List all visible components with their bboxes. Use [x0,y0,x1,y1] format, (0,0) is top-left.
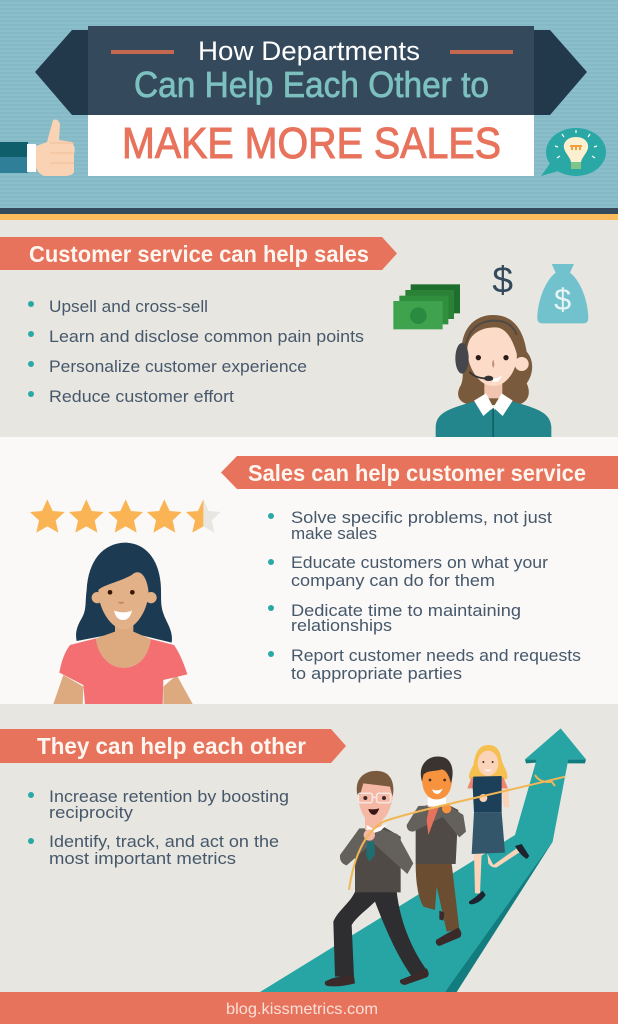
ribbon heading: Sales can help customer service [248,460,586,486]
footer [0,992,618,1024]
bullet list [28,297,364,406]
bullet list: Reduce customer effort [49,387,234,406]
title line 3: MAKE MORE SALES [122,119,501,168]
ribbon heading: They can help each other [37,733,306,759]
front man figure [325,771,429,986]
bullet list: Identify, track, and act on the [49,832,279,851]
bullet list: to appropriate parties [291,664,462,683]
icon: money bag: $ [554,283,571,317]
icon: banknotes [393,284,460,329]
footer: blog.kissmetrics.com [226,1001,378,1018]
illustration: team pulling up growth arrow [260,728,586,992]
woman figure [467,745,529,904]
bullet list: Educate customers on what your [291,553,548,572]
panel: they can help each other [0,704,618,992]
bullet list: Personalize customer experience [49,357,307,376]
bullet list: most important metrics [49,849,236,868]
banner ribbon [35,26,587,176]
icon: idea bubble [541,128,606,176]
bullet list: company can do for them [291,571,495,590]
icon: dollar sign: $ [492,259,513,301]
panel: customer service can help sales [0,220,618,437]
rope [349,775,565,890]
bullet list: reciprocity [49,803,134,822]
illustration: stars and customer [30,499,221,704]
bullet list [268,508,581,683]
ribbon heading: Customer service can help sales [29,241,369,267]
panel: header [0,0,618,220]
title line 2: Can Help Each Other to [134,64,489,105]
title line 1: How Departments [198,36,420,66]
illustration: agent with money [393,259,588,437]
icon: money bag [537,264,588,323]
bullet list: Learn and disclose common pain points [49,327,364,346]
bullet list [28,787,289,868]
middle man figure [407,756,466,946]
bullet list: Increase retention by boosting [49,787,289,806]
bullet list: Upsell and cross-sell [49,297,208,316]
bullet list: Report customer needs and requests [291,646,581,665]
agent figure [436,315,551,437]
icon: thumbs up [0,120,75,176]
bullet list: relationships [291,616,392,635]
customer figure [53,543,193,704]
panel: sales can help customer service [0,437,618,704]
star rating [30,499,221,533]
bullet list: Solve specific problems, not just [291,508,552,527]
bullet list: Dedicate time to maintaining [291,601,521,620]
bullet list: make sales [291,524,377,543]
ribbon heading [0,729,346,763]
growth arrow [260,728,586,992]
